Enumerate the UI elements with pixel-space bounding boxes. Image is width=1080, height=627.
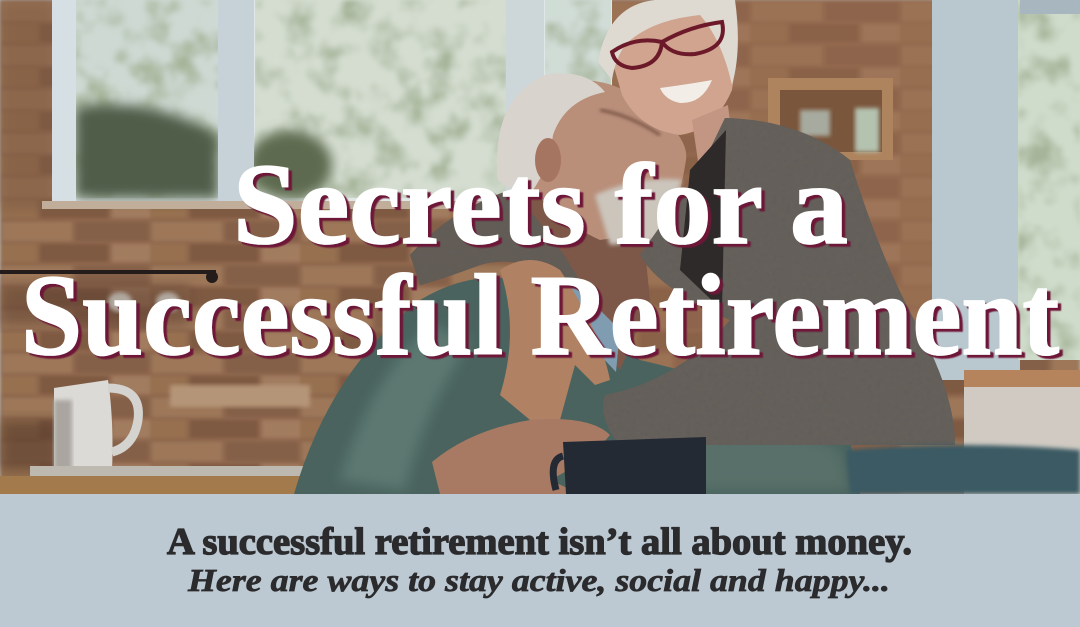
woman: grey cardigan and arm xyxy=(410,118,955,445)
background photo: couple embracing in a kitchen xyxy=(0,0,1080,494)
hands xyxy=(432,260,610,494)
title xyxy=(21,141,1059,380)
man: neck and shirt collar xyxy=(530,199,650,372)
man: green sweater xyxy=(294,278,860,494)
woman: face and hair xyxy=(598,0,738,175)
right-side counter xyxy=(964,370,1080,494)
subtitle band xyxy=(0,494,1080,627)
title: Secrets for a xyxy=(233,141,848,269)
white kettle xyxy=(54,380,138,472)
subtitle line 2: Here are ways to stay active, social and happy... xyxy=(187,562,890,598)
man: head and hair xyxy=(497,73,686,245)
window right and white column xyxy=(932,0,1080,380)
subtitle line 1: A successful retirement isn’t all about money. xyxy=(167,521,912,563)
coffee mugs xyxy=(553,437,1080,494)
window left xyxy=(42,0,612,209)
red glasses xyxy=(612,22,723,68)
rail with hanging mugs xyxy=(0,270,218,312)
countertop xyxy=(0,466,310,494)
brick wall xyxy=(0,0,1080,494)
wooden wall shelf xyxy=(768,78,893,160)
